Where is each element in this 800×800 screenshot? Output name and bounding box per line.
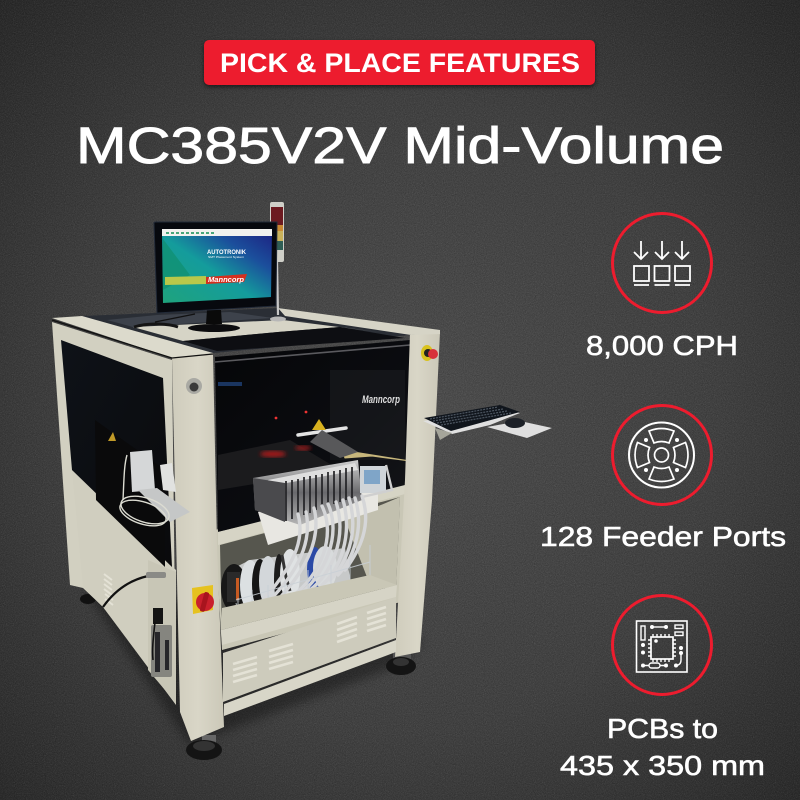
feature: 8,000 CPH [586,214,738,361]
floor shadow [85,580,425,745]
warning label and handle [298,419,346,435]
interior behind the front opening [215,480,408,650]
monitor: Manncorp [208,277,245,284]
badge: pick and place features [204,40,595,87]
icon: circuit board [612,596,712,694]
feet [80,594,416,760]
cable bracket on left side [117,450,190,531]
left side of the cabinet [52,322,176,705]
monitor [134,222,277,332]
feature: 8,000 CPH: 8,000 CPH [586,330,738,361]
feeder tray [236,545,370,616]
feeder ribbon cables [258,496,366,606]
badge: pick and place features: PICK & PLACE FEATURES [220,48,580,78]
machine photo illustration [52,202,552,760]
icon: placement arrows [612,214,712,312]
front right pillar [395,332,440,657]
air hose and regulator [103,572,172,677]
lower cabinet [221,575,397,716]
logo on front panel: Manncorp [362,394,400,406]
white shelf under the black panel [218,476,405,545]
steel indicator button [186,378,202,394]
feature: 128 feeder ports [540,406,786,552]
on-screen text: AUTOTRONIK [207,249,246,256]
monitor: SMT Placement System [208,255,245,259]
black front panel [215,340,410,532]
title: MC385V2V Mid-Volume [76,117,724,174]
front left pillar [172,353,224,741]
component reels [221,546,352,612]
red rotary disconnect switch [192,585,214,614]
emergency stop button [421,345,438,361]
feature: 128 feeder ports: 128 Feeder Ports [540,521,786,552]
feature: PCB size: PCBs to [607,713,718,744]
feature: PCB size: 435 x 350 mm [560,750,765,781]
placement head [253,430,410,525]
cabinet vents [233,607,386,682]
feature: PCB size [560,596,765,781]
icon: feeder wheel [612,406,712,504]
side vents [104,574,113,605]
signal tower [270,202,286,322]
keyboard tray [423,405,552,440]
top panel [52,308,440,358]
